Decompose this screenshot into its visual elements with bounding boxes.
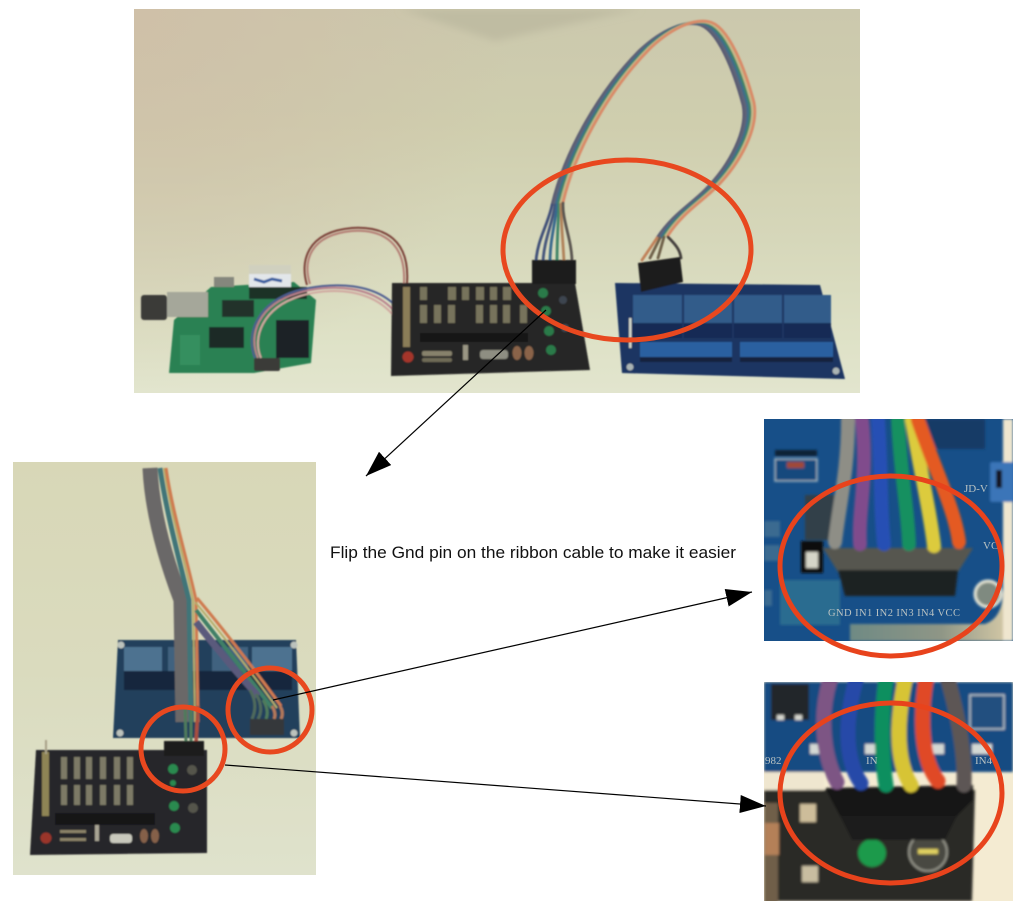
callout ring: proto board connector xyxy=(141,707,225,791)
connectors, top view xyxy=(164,719,284,756)
caption: Flip the Gnd pin on the ribbon cable to make it easier xyxy=(330,544,737,562)
silkscreen labels: IN xyxy=(866,755,878,767)
silkscreen pin labels: GND IN1 IN2 IN3 IN4 VCC xyxy=(828,608,960,619)
arrow: relay connector to close-up xyxy=(273,592,752,700)
callout ring: relay board connector xyxy=(228,668,312,752)
close-up wires xyxy=(824,680,964,785)
connector housing xyxy=(823,548,973,596)
silkscreen labels xyxy=(765,757,992,764)
silkscreen pin labels: VC xyxy=(983,540,998,552)
photo: top-down view of boards xyxy=(13,462,316,875)
silkscreen pin labels xyxy=(828,483,998,619)
photo: full assembly with boards and ribbon cable xyxy=(134,9,860,393)
silkscreen pin labels: JD-V xyxy=(964,483,988,495)
photo: proto board connector close-up xyxy=(764,680,1013,903)
close-up LED xyxy=(858,839,886,867)
relay board, top view xyxy=(113,640,300,738)
connector housing xyxy=(825,785,973,840)
close-up solder ring xyxy=(909,833,947,871)
arrow: proto connector to close-up xyxy=(225,765,766,806)
close-up wires xyxy=(835,420,959,546)
callout ring: relay close-up xyxy=(780,476,1002,656)
prototype board, top view xyxy=(30,740,207,855)
ribbon cable xyxy=(536,21,755,262)
hookup wires xyxy=(252,228,407,358)
callout ring: proto board close-up xyxy=(780,703,1002,883)
arrow: top photo to side view xyxy=(366,310,546,476)
callout ring: top photo connectors xyxy=(503,160,751,340)
prototype board xyxy=(391,283,590,376)
controller board xyxy=(141,265,316,373)
silkscreen labels: IN4 xyxy=(975,755,993,767)
ribbon cable, top view xyxy=(150,468,282,743)
silkscreen labels: 982 xyxy=(765,755,782,767)
relay board xyxy=(615,283,845,379)
connectors xyxy=(532,257,683,292)
photo: relay board connector close-up xyxy=(764,419,1014,641)
